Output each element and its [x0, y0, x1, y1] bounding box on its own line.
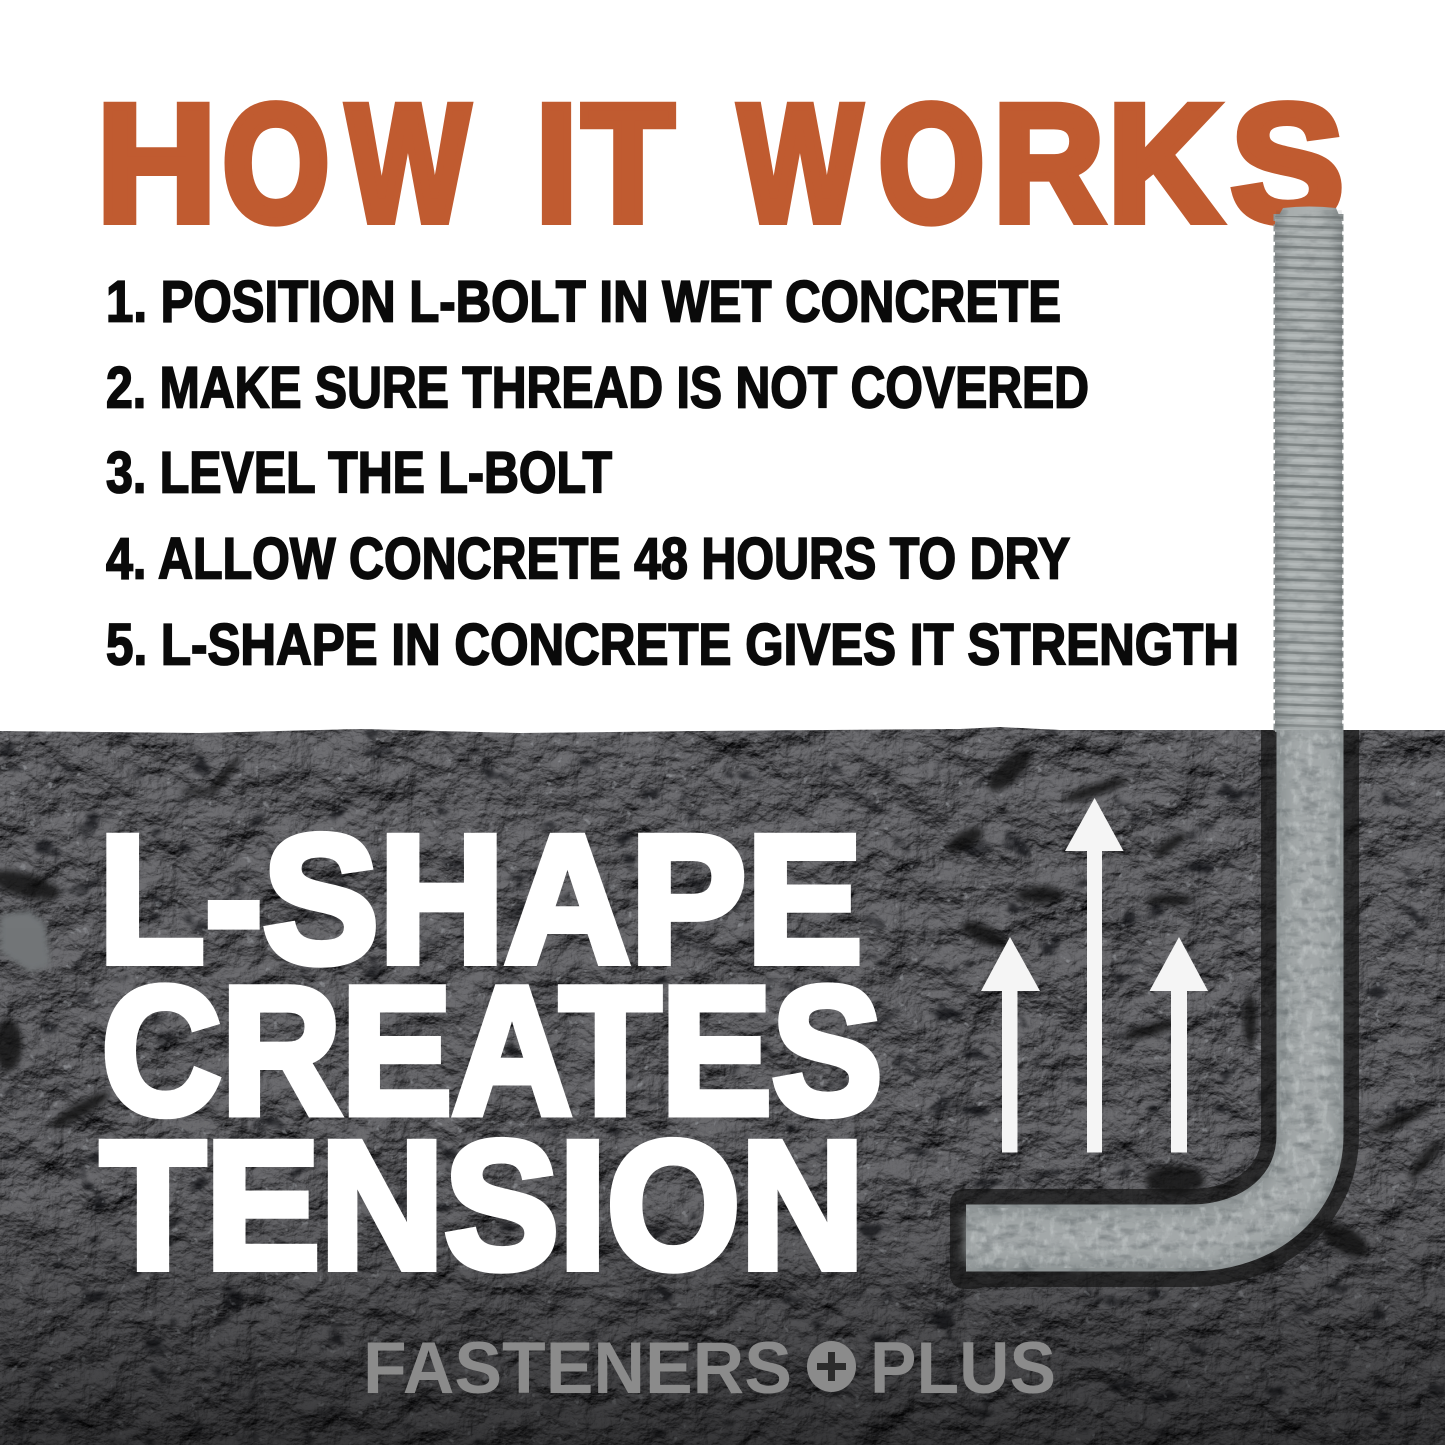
bolt shadow outline [950, 730, 1310, 1289]
title: S [1231, 72, 1344, 256]
logo icon: screw head [807, 1341, 856, 1392]
step 3: 3. LEVEL THE L-BOLT [106, 440, 612, 506]
step 1: 1. POSITION L-BOLT IN WET CONCRETE [106, 270, 1061, 334]
title: O [879, 72, 984, 256]
arrow: right [1150, 937, 1208, 1152]
tension arrows [981, 798, 1208, 1152]
title: I [536, 72, 577, 256]
concrete ground [0, 720, 1445, 1445]
logo word: PLUS: PLUS [870, 1328, 1056, 1409]
arrow: centre [1065, 798, 1124, 1152]
step 5: 5. L-SHAPE IN CONCRETE GIVES IT STRENGTH [106, 612, 1239, 678]
title: W [739, 72, 861, 256]
title: O [223, 72, 329, 256]
large statement [98, 797, 882, 1307]
step 4: 4. ALLOW CONCRETE 48 HOURS TO DRY [106, 526, 1070, 592]
arrow: left [981, 937, 1040, 1152]
title: R [993, 72, 1104, 256]
title: W [347, 72, 469, 256]
title: T [582, 72, 674, 256]
line: TENSION: TENSION [100, 1103, 864, 1307]
line: L-SHAPE: L-SHAPE [98, 797, 862, 1001]
instruction steps [106, 270, 1239, 678]
smooth bent shaft [966, 730, 1310, 1238]
L-bolt [966, 206, 1343, 1238]
line: CREATES: CREATES [102, 948, 882, 1152]
title: K [1108, 72, 1220, 256]
threaded shaft [1275, 206, 1343, 732]
logo: Fasteners Plus [363, 1328, 1056, 1409]
title [97, 72, 1344, 256]
logo word: FASTENERS: FASTENERS [363, 1328, 792, 1409]
exposed light patch [0, 910, 50, 972]
title: H [97, 72, 216, 256]
step 2: 2. MAKE SURE THREAD IS NOT COVERED [106, 356, 1089, 420]
